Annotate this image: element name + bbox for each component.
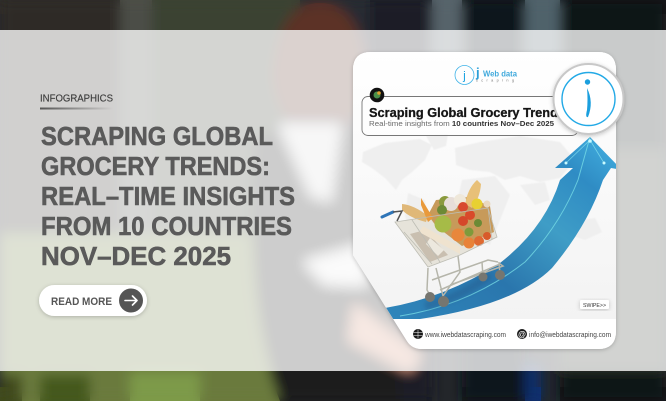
card logo: j bbox=[475, 65, 480, 80]
world map bbox=[362, 136, 599, 230]
card logo bbox=[455, 65, 518, 84]
swipe tag: SWIPE>> bbox=[583, 303, 607, 309]
main heading: NOV–DEC 2025 bbox=[41, 243, 231, 271]
card subtitle: Real-time insights from 10 countries Nov–Dec 2025 bbox=[369, 119, 554, 128]
swipe tag bbox=[580, 300, 609, 309]
main heading: GROCERY TRENDS: bbox=[41, 153, 270, 181]
artwork background bbox=[353, 52, 616, 319]
icon: arrow circle bbox=[119, 288, 143, 312]
icon: globe bbox=[413, 329, 423, 339]
footer strip bbox=[393, 319, 616, 349]
card logo: scraping bbox=[476, 78, 514, 82]
cart basket wires bbox=[395, 208, 497, 267]
email: info@iwebdatascraping.com bbox=[529, 332, 611, 339]
text block: left column bbox=[40, 92, 295, 271]
card logo: j bbox=[462, 68, 466, 82]
read more button bbox=[39, 285, 147, 316]
main heading: SCRAPING GLOBAL bbox=[41, 123, 273, 151]
read more button: READ MORE bbox=[51, 296, 112, 308]
website: www.iwebdatascraping.com bbox=[424, 332, 506, 339]
main heading: REAL–TIME INSIGHTS bbox=[41, 183, 295, 211]
main heading bbox=[41, 123, 295, 271]
card logo: Web data bbox=[483, 70, 518, 78]
card heading box bbox=[362, 88, 578, 136]
cart frame bbox=[427, 256, 503, 300]
label: infographics: INFOGRAPHICS bbox=[40, 92, 113, 104]
icon: globe badge bbox=[370, 88, 384, 102]
cart groceries bbox=[402, 180, 494, 262]
cart wheels bbox=[425, 270, 505, 307]
main heading: FROM 10 COUNTRIES bbox=[41, 213, 292, 241]
underline rule bbox=[40, 108, 113, 110]
cart handle bbox=[382, 211, 402, 221]
panel: infographic preview card bbox=[353, 52, 624, 349]
shopping cart bbox=[382, 180, 505, 307]
growth arrow bbox=[385, 137, 622, 319]
round logo badge bbox=[554, 64, 624, 134]
cart basket bbox=[396, 219, 496, 266]
icon: at sign: @ bbox=[518, 330, 526, 339]
card title: Scraping Global Grocery Trends bbox=[369, 105, 565, 120]
